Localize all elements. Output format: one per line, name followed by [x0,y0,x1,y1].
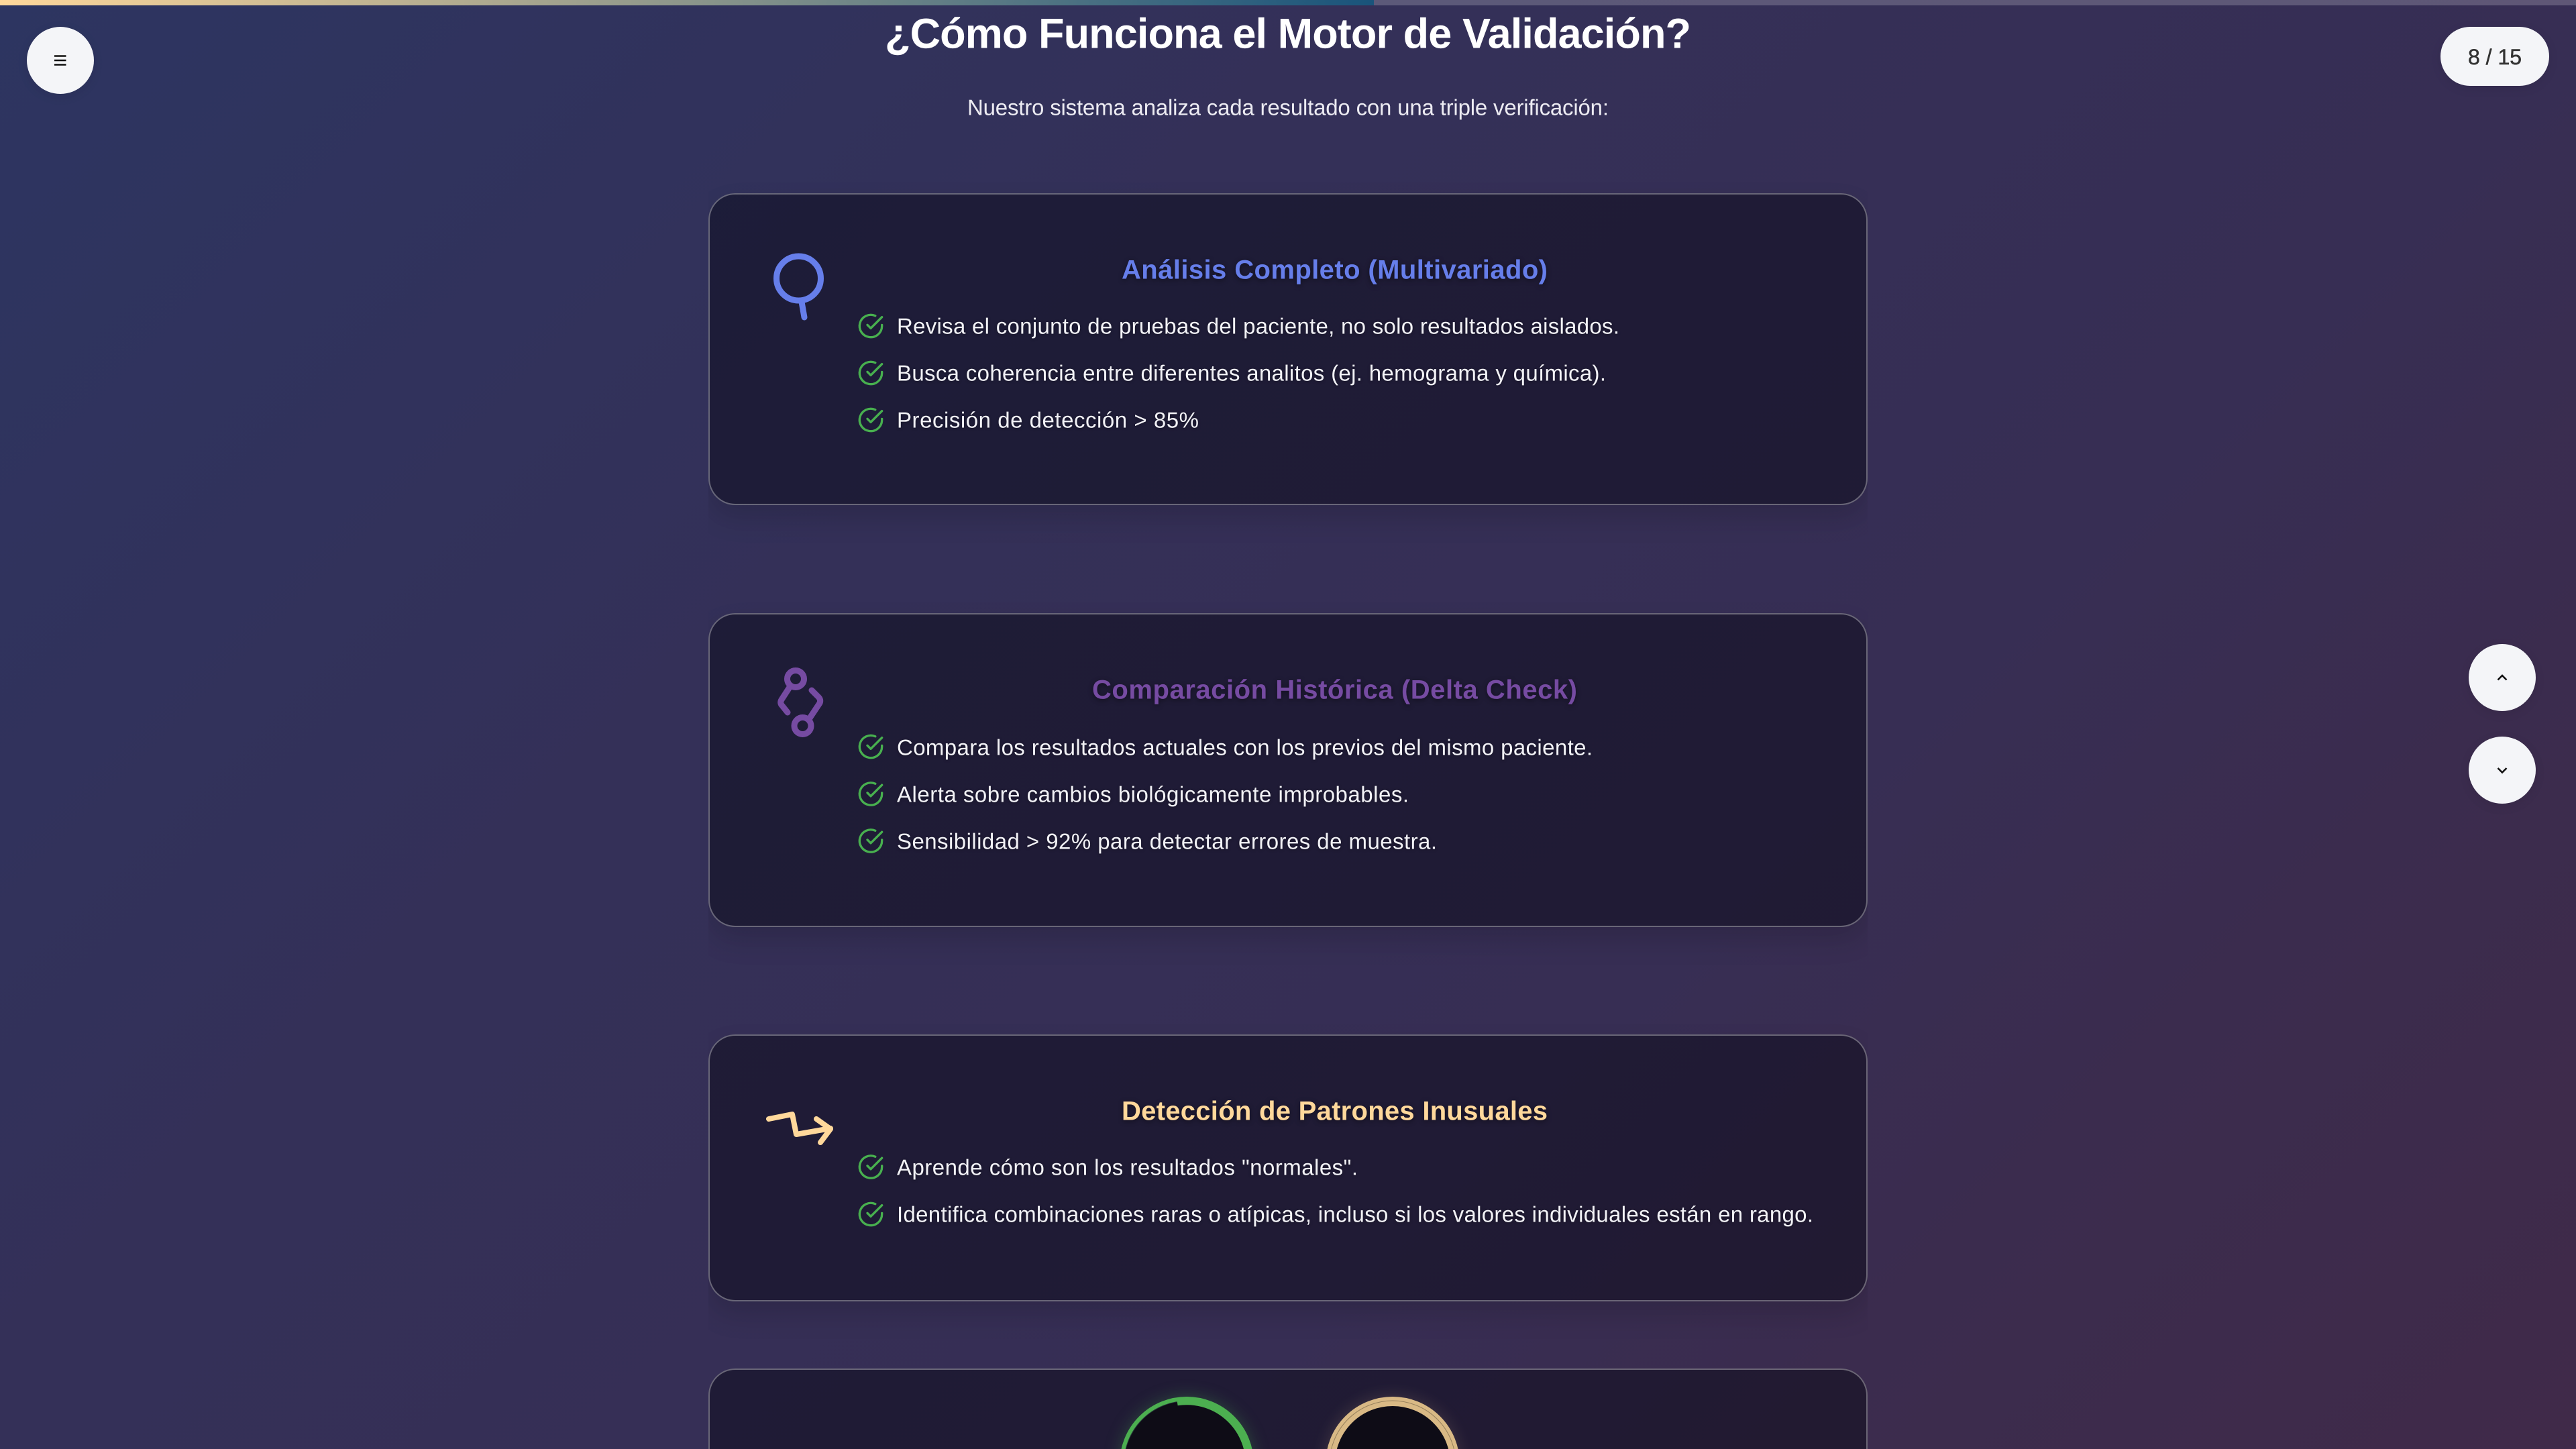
icon: delta branch [781,671,820,734]
heading: detección de patrones: Detección de Patrones Inusuales [1122,1096,1548,1126]
check item 3: Precisión de detección > 85% [897,408,1199,432]
check item 2: Alerta sobre cambios biológicamente improbables. [897,782,1409,806]
menu button [27,27,94,94]
gauge: tan ring [1330,1401,1456,1449]
panel: detección de patrones [708,1034,1868,1301]
title: ¿Cómo Funciona el Motor de Validación? [885,11,1691,58]
check item 3: Sensibilidad > 92% para detectar errores de muestra. [897,829,1437,853]
panel: análisis completo [708,193,1868,505]
gauge: green ring [1122,1399,1252,1449]
check item 1: Compara los resultados actuales con los previos del mismo paciente. [897,735,1593,759]
button: next slide [2469,737,2536,804]
progress bar [0,0,2576,5]
button: previous slide [2469,644,2536,711]
panel: metrics [708,1368,1868,1449]
check item 2: Busca coherencia entre diferentes analitos (ej. hemograma y química). [897,361,1606,385]
check item 1: Aprende cómo son los resultados "normales". [897,1155,1358,1179]
panel: comparación histórica [708,613,1868,927]
slide counter: 8 / 15 [2468,44,2522,68]
heading: análisis completo: Análisis Completo (Multivariado) [1122,255,1548,284]
slide counter [2440,27,2549,86]
subtitle: Nuestro sistema analiza cada resultado con una triple verificación: [967,95,1609,119]
progress bar fill [0,0,1374,5]
icon: trend arrow [769,1114,830,1142]
check item 1: Revisa el conjunto de pruebas del paciente, no solo resultados aislados. [897,314,1619,338]
heading: comparación histórica: Comparación Histórica (Delta Check) [1092,675,1577,704]
icon: magnifier [777,256,821,317]
check item 2: Identifica combinaciones raras o atípicas, incluso si los valores individuales están en rango. [897,1202,1813,1226]
